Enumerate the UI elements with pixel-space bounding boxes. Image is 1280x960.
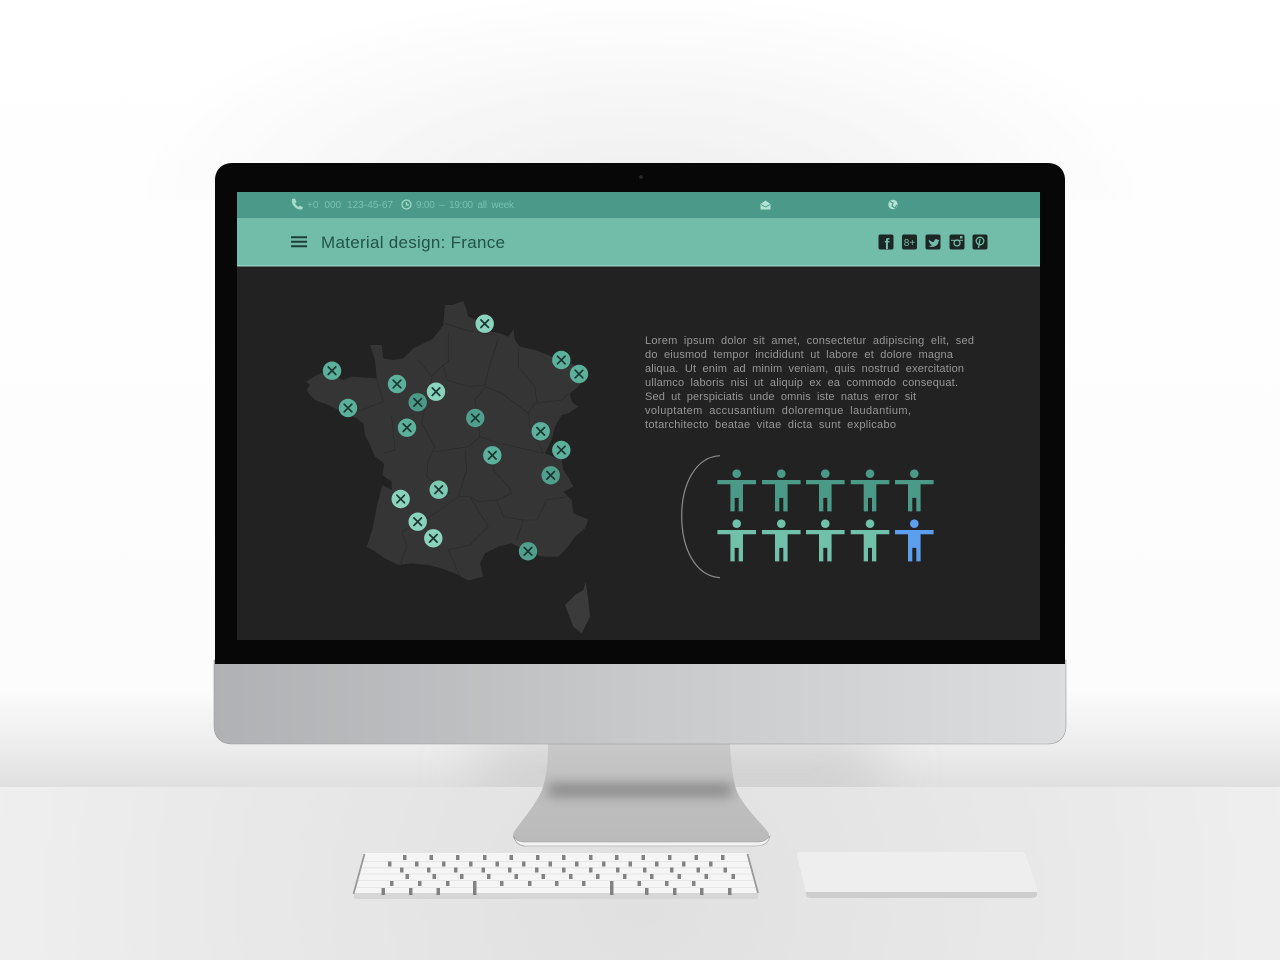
trackpad [797,852,1037,898]
background: wall shadow at top [120,0,1160,200]
pictogram: people [717,469,934,561]
body text: do eiusmod tempor incididunt ut labore et dolore magna [645,349,954,361]
screen [237,192,1040,640]
body text: voluptatem accusantium doloremque laudantium, [645,405,911,417]
background: shadow below the monitor [480,745,880,795]
keyboard keys [382,855,735,895]
corsica [565,582,590,633]
map markers [323,314,588,560]
icon: pinterest [972,234,988,250]
body text: Lorem ipsum dolor sit amet, consectetur adipiscing elit, sed [645,335,974,347]
icon: clock [402,200,411,209]
monitor chin [214,660,1066,744]
screen content background [237,266,1040,640]
body text: totarchitecto beatae vitae dicta sunt explicabo [645,419,896,431]
body text: aliqua. Ut enim ad minim veniam, quis nostrud exercitation [645,363,964,375]
icon: facebook: f [884,236,890,253]
icon: globe [888,200,898,209]
body text: ullamco laboris nisi ut aliquip ex ea commodo consequat. [645,377,958,389]
icon: google plus: 8+ [904,238,915,249]
icon: twitter [926,234,940,250]
row 2 [717,519,934,561]
monitor stand [513,744,770,846]
map of France [306,301,590,633]
body text: Sed ut perspiciatis unde omnis iste natus error sit [645,391,916,403]
icon: envelope [760,200,770,210]
bracket arc [682,456,720,578]
opening hours: 9:00 – 19:00 all week [416,200,515,211]
icon: phone [292,198,303,210]
mainland [306,301,588,581]
icon: instagram [950,234,964,250]
row 1 [717,469,934,511]
header bar [237,218,1040,266]
monitor bezel [215,163,1065,664]
background: desk [0,787,1280,960]
icon: menu [291,237,307,246]
title: Material design: France [321,233,505,252]
top contact bar [237,192,1040,218]
social icons [878,234,988,253]
keyboard [353,853,758,899]
region borders [338,323,568,577]
phone number: +0 000 123-45-67 [307,200,393,211]
webcam [639,175,643,179]
body text [645,335,974,431]
